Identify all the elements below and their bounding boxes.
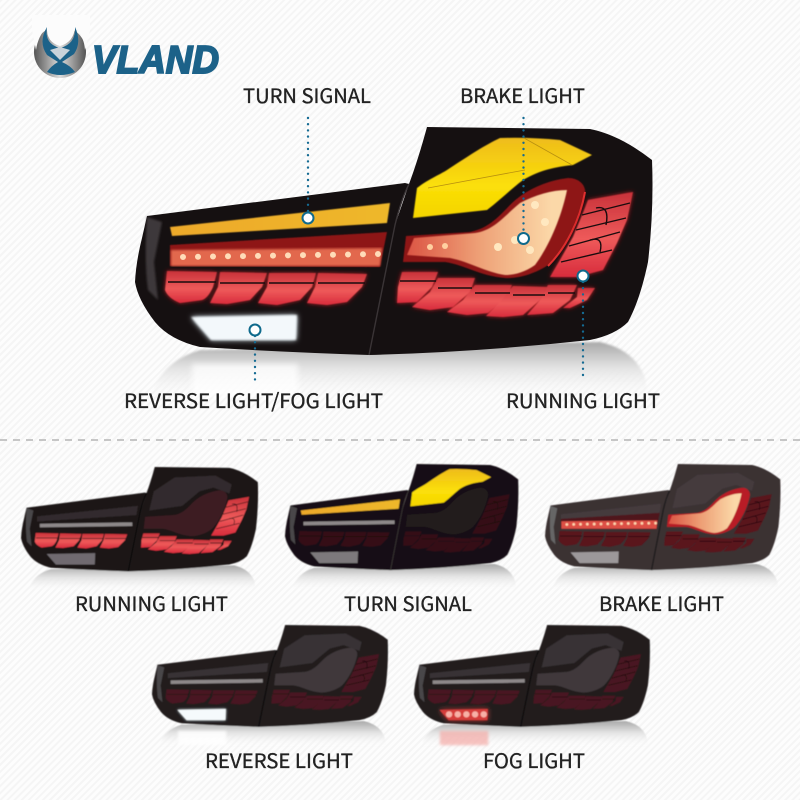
label: brake light: BRAKE LIGHT bbox=[460, 80, 585, 109]
label: running light: RUNNING LIGHT bbox=[506, 385, 660, 414]
callout: turn signal bbox=[243, 80, 371, 224]
lamp housing bbox=[135, 127, 652, 355]
label: BRAKE LIGHT bbox=[599, 588, 724, 617]
logo: VLAND bbox=[32, 15, 219, 82]
logo wordmark: VLAND bbox=[92, 39, 219, 82]
label: turn signal: TURN SIGNAL bbox=[243, 80, 371, 109]
main tail light photo illustration bbox=[135, 127, 652, 398]
label: reverse light / fog light: REVERSE LIGHT/FOG LIGHT bbox=[124, 385, 383, 414]
panel: brake light bbox=[545, 464, 780, 617]
brake light bar and blade bbox=[170, 178, 585, 278]
callout: brake light bbox=[460, 80, 585, 244]
reflection under main lights bbox=[150, 342, 648, 398]
panel: fog light bbox=[414, 625, 650, 774]
running light OLED segments bbox=[165, 192, 633, 317]
panel: reverse light bbox=[152, 625, 388, 774]
callout: running light bbox=[506, 270, 660, 414]
label: FOG LIGHT bbox=[483, 745, 585, 774]
icon: winged emblem bbox=[32, 15, 90, 78]
label: RUNNING LIGHT bbox=[75, 588, 228, 617]
label: TURN SIGNAL bbox=[344, 588, 472, 617]
amber turn signal segments bbox=[170, 138, 592, 236]
reverse light bbox=[191, 315, 297, 340]
callout: reverse / fog light bbox=[124, 324, 383, 414]
label: REVERSE LIGHT bbox=[205, 745, 353, 774]
panel: turn signal bbox=[285, 464, 518, 617]
panel: running light bbox=[21, 467, 258, 617]
